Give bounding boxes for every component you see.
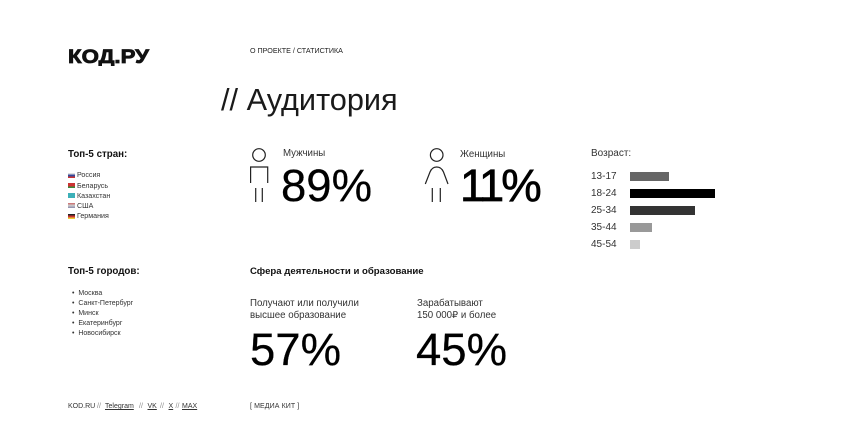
flag: Kazakhstan	[68, 193, 75, 198]
flag: Belarus	[68, 183, 75, 188]
icon: woman	[424, 148, 448, 202]
title: // Аудитория	[221, 82, 398, 117]
label: higher education	[250, 298, 359, 321]
bar 18-24	[630, 189, 715, 198]
city: Moscow: • Москва	[72, 290, 102, 297]
footer: media kit: [ МЕДИА КИТ ]	[250, 403, 299, 410]
age label 25-34: 25-34	[591, 205, 617, 216]
flag: USA	[68, 203, 75, 208]
age label 45-54: 45-54	[591, 239, 617, 250]
footer: Telegram: Telegram	[105, 403, 134, 410]
stat: women 11%: 11%	[460, 160, 542, 211]
heading: age: Возраст:	[591, 148, 631, 159]
label: income: Зарабатывают	[417, 298, 483, 309]
country: Kazakhstan: Казахстан	[77, 192, 110, 200]
panel: age chart	[591, 148, 715, 250]
bar 45-54	[630, 240, 640, 249]
heading: top cities: Топ-5 городов:	[68, 266, 140, 277]
bar 25-34	[630, 206, 695, 215]
bar 35-44	[630, 223, 652, 232]
footer: VK: VK	[148, 403, 157, 410]
footer: separator: //	[97, 403, 101, 410]
footer: separator: //	[139, 403, 143, 410]
icon: man	[250, 148, 268, 202]
stat: 57%: 57%	[250, 324, 341, 375]
flag: Russia	[68, 173, 75, 178]
panel: top countries	[68, 149, 127, 220]
label: men: Мужчины	[283, 148, 325, 159]
footer links	[68, 402, 198, 410]
label: income: 150 000₽ и более	[417, 310, 496, 321]
panel: top cities	[68, 266, 140, 337]
footer: site name: KOD.RU	[68, 403, 95, 410]
footer: MAX: MAX	[182, 403, 197, 410]
city: Novosibirsk: • Новосибирск	[72, 330, 121, 337]
flag: Germany	[68, 214, 75, 219]
country: Germany: Германия	[77, 212, 109, 220]
city: Minsk: • Минск	[72, 310, 99, 317]
footer: X: X	[168, 403, 173, 410]
stat: men 89%: 89%	[281, 160, 372, 211]
country: Russia: Россия	[77, 171, 100, 179]
heading: top countries: Топ-5 стран:	[68, 149, 127, 160]
footer: separator: //	[176, 403, 179, 410]
country: USA: США	[77, 202, 93, 210]
city: Yekaterinburg: • Екатеринбург	[72, 320, 122, 327]
age label 35-44: 35-44	[591, 222, 617, 233]
city: Saint Petersburg: • Санкт-Петербург	[72, 300, 133, 307]
stat: 45%: 45%	[416, 324, 507, 375]
label: higher education: высшее образование	[250, 310, 346, 321]
country: Belarus: Беларусь	[77, 182, 108, 190]
breadcrumb: О ПРОЕКТЕ / СТАТИСТИКА	[250, 47, 343, 55]
label: women: Женщины	[460, 149, 505, 160]
footer: separator: //	[160, 403, 164, 410]
label: income	[417, 298, 496, 321]
bar 13-17	[630, 172, 669, 181]
age label 18-24: 18-24	[591, 188, 617, 199]
age label 13-17: 13-17	[591, 171, 617, 182]
heading: occupation and education: Сфера деятельности и образование	[250, 266, 424, 277]
label: higher education: Получают или получили	[250, 298, 359, 309]
